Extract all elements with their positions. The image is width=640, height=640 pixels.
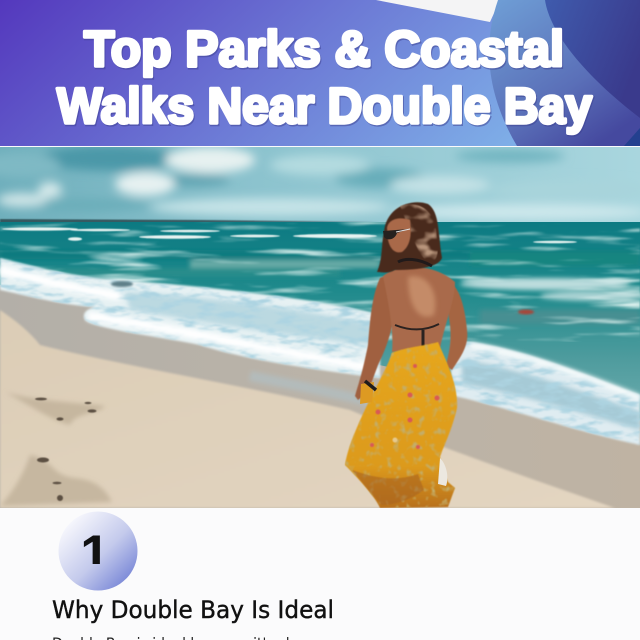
sky with clouds (0, 145, 640, 223)
decorative white corner shape (376, 0, 500, 22)
left arm (355, 277, 396, 400)
dry sand (0, 310, 615, 508)
footprints in sand (0, 392, 112, 506)
sunglasses (383, 229, 409, 239)
wet sand (0, 285, 640, 508)
title: Top Parks & Coastal (85, 22, 565, 78)
title (57, 21, 593, 136)
breaking waves and foam (0, 258, 640, 445)
woman in yellow dress (345, 202, 467, 508)
lower white section (0, 508, 640, 640)
sea (0, 222, 640, 420)
title: Walks Near Double Bay (58, 80, 593, 136)
step number badge (58, 512, 138, 590)
neck halter (398, 259, 432, 266)
section heading: Why Double Bay Is Ideal (52, 596, 334, 624)
face (387, 218, 411, 252)
back (383, 267, 455, 352)
beach photo (0, 145, 640, 508)
right arm (446, 282, 467, 370)
hair (377, 202, 442, 272)
distant shoreline (0, 218, 374, 222)
title: Top Parks & Coastal (84, 21, 564, 77)
dress (345, 342, 457, 508)
decorative dark corner (624, 128, 640, 146)
distant whitecaps (2, 227, 577, 243)
white lining (438, 458, 447, 486)
decorative blue circle (489, 0, 640, 146)
dress floral pattern (352, 364, 440, 505)
number 1: 1 (80, 525, 110, 584)
header banner (0, 0, 640, 146)
title: Walks Near Double Bay (57, 78, 592, 134)
scarf at wrist (360, 382, 374, 404)
decorative dark blue shape (545, 0, 640, 118)
bikini strap (395, 324, 439, 329)
